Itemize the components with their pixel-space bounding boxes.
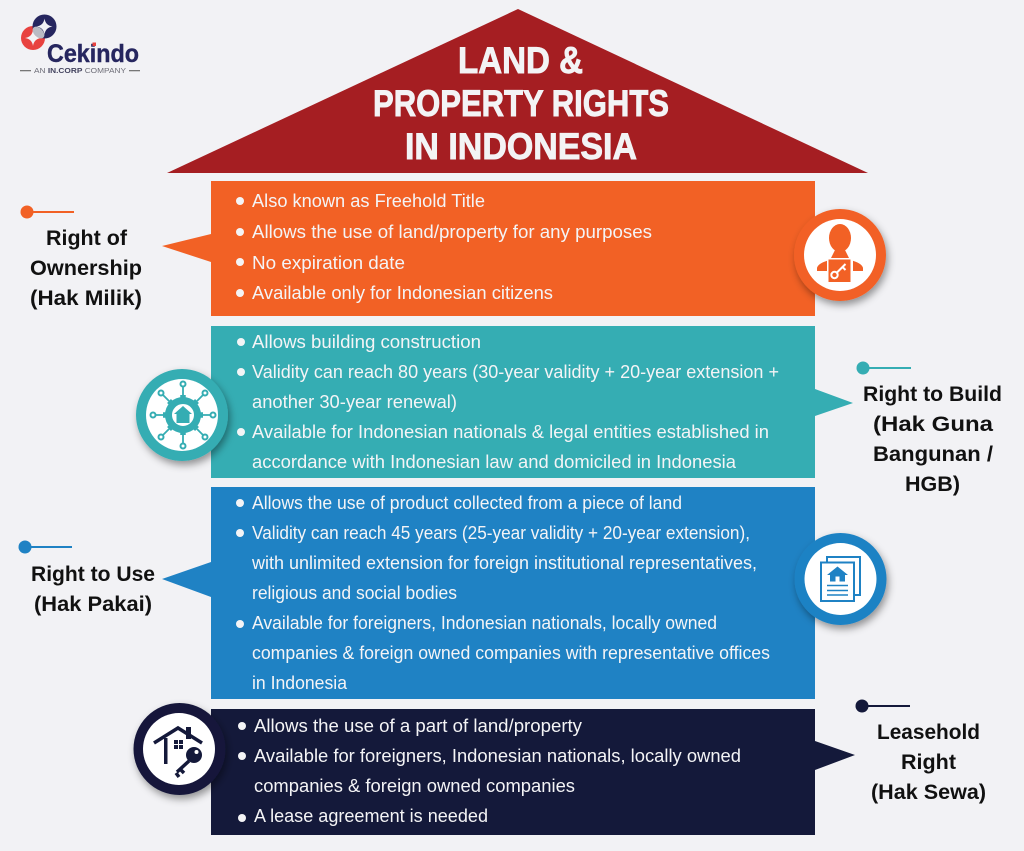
title <box>373 40 669 167</box>
bullet list: Available only for Indonesian citizens <box>252 283 553 303</box>
label: leasehold right: Leasehold <box>877 721 980 744</box>
label: right to build: (Hak Guna <box>873 413 993 436</box>
logo: Cekindo: Cekindo <box>47 40 139 68</box>
bullet list: A lease agreement is needed <box>254 806 488 826</box>
icon: property documents <box>794 533 886 625</box>
bullet list: Available for foreigners, Indonesian nationals, locally owned <box>254 746 741 766</box>
bullet list: companies & foreign owned companies <box>254 776 575 796</box>
bullet list: another 30-year renewal) <box>252 392 457 412</box>
label: right to use: Right to Use <box>31 563 155 586</box>
label: right of ownership <box>20 206 142 310</box>
icon: house and key <box>134 703 226 795</box>
bullet list: Allows the use of land/property for any purposes <box>252 222 652 242</box>
label: right of ownership: Ownership <box>30 257 142 280</box>
bullet list: companies & foreign owned companies with representative offices <box>252 643 770 663</box>
bullet list: Validity can reach 45 years (25-year validity + 20-year extension), <box>252 523 750 543</box>
panel: right to use <box>162 487 815 699</box>
bullet list: religious and social bodies <box>252 583 457 603</box>
label: right of ownership: Right of <box>46 227 128 250</box>
label: right to use <box>18 540 155 616</box>
icon: person with key <box>794 209 886 301</box>
label: right to build: Right to Build <box>863 383 1002 406</box>
bullet list: with unlimited extension for foreign institutional representatives, <box>251 553 757 573</box>
title: LAND & <box>458 40 583 81</box>
label: right to build <box>856 362 1002 496</box>
bullet list: in Indonesia <box>252 673 348 693</box>
bullet list: Available for Indonesian nationals & legal entities established in <box>252 422 769 442</box>
bullet list: Allows the use of product collected from a piece of land <box>252 493 682 513</box>
icon: gear with house <box>136 369 228 461</box>
panel: leasehold right <box>211 709 855 835</box>
bullet list: No expiration date <box>252 253 405 273</box>
label: right to use: (Hak Pakai) <box>34 593 152 616</box>
bullet list <box>236 493 770 693</box>
label: right to build: Bangunan / <box>873 443 993 466</box>
bullet list <box>237 332 779 472</box>
bullet list: Also known as Freehold Title <box>252 191 485 211</box>
title: PROPERTY RIGHTS <box>373 83 669 124</box>
label: leasehold right: Right <box>901 751 956 774</box>
bullet list <box>236 191 652 303</box>
panel: right of ownership <box>162 181 815 316</box>
bullet list: Allows building construction <box>252 332 481 352</box>
bullet list: Allows the use of a part of land/property <box>254 716 582 736</box>
label: right to build: HGB) <box>905 473 960 496</box>
panel: right to build <box>211 326 853 478</box>
title: IN INDONESIA <box>405 126 637 167</box>
bullet list: Available for foreigners, Indonesian nationals, locally owned <box>252 613 717 633</box>
bullet list <box>238 716 741 826</box>
logo: Cekindo: AN IN.CORP COMPANY <box>34 66 126 75</box>
label: leasehold right: (Hak Sewa) <box>871 781 986 804</box>
label: leasehold right <box>856 700 986 804</box>
bullet list: accordance with Indonesian law and domiciled in Indonesia <box>252 452 737 472</box>
label: right of ownership: (Hak Milik) <box>30 287 142 310</box>
bullet list: Validity can reach 80 years (30-year validity + 20-year extension + <box>252 362 779 382</box>
roof with title <box>167 9 868 173</box>
logo: Cekindo <box>20 14 140 75</box>
